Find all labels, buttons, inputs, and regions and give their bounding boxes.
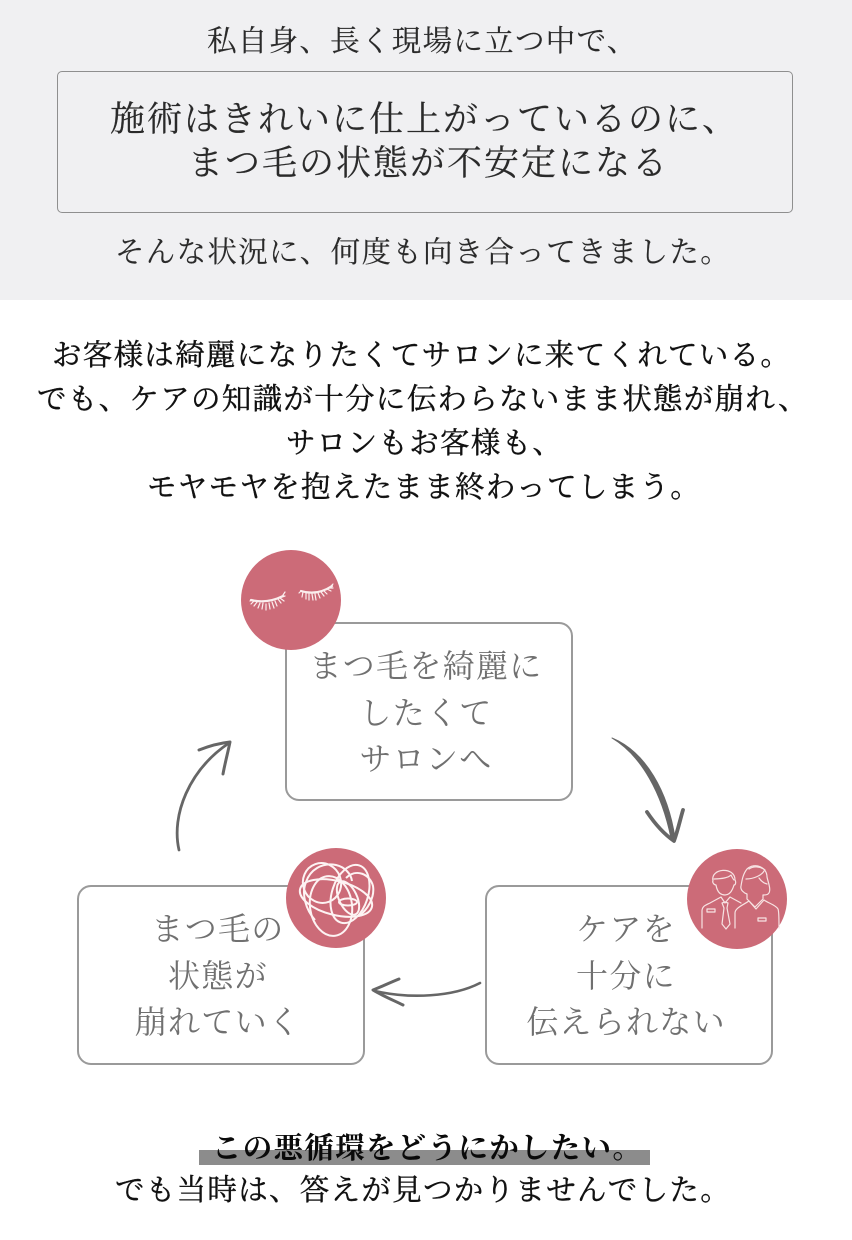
arrow: right box to left box — [372, 978, 482, 1007]
panel: cycle box left — [77, 885, 365, 1065]
text: box top label: サロンへ — [359, 741, 493, 777]
arrow: top box to right box — [612, 738, 685, 843]
text: conclusion line: でも当時は、答えが見つかりませんでした。 — [115, 1175, 731, 1207]
highlight bar — [199, 1150, 650, 1165]
text block: conclusion — [115, 1132, 731, 1207]
text: box right label: 伝えられない — [526, 1004, 726, 1040]
text block: explanation: モヤモヤを抱えたまま終わってしまう。 — [147, 472, 701, 504]
text: intro line: 私自身、長く現場に立つ中で、 — [207, 26, 638, 58]
text: statement line 1: 施術はきれいに仕上がっているのに、 — [110, 100, 739, 139]
panel: cycle box top — [285, 622, 573, 801]
text: box right label: ケアを — [576, 911, 676, 947]
icon: eyelashes badge — [241, 550, 341, 650]
text block: explanation: お客様は綺麗になりたくてサロンに来てくれている。 — [52, 340, 791, 372]
text: box right label — [526, 911, 726, 1040]
callout: highlighted statement box — [57, 71, 793, 213]
text block: explanation: でも、ケアの知識が十分に伝わらないまま状態が崩れ、 — [37, 384, 809, 416]
icon: tangled lash badge — [286, 848, 386, 948]
text: box top label: したくて — [359, 694, 493, 730]
text: box left label — [135, 911, 301, 1040]
text: box left label: まつ毛の — [151, 911, 285, 947]
text block: explanation: サロンもお客様も、 — [286, 428, 563, 460]
text: conclusion bold line: この悪循環をどうにかしたい。 — [212, 1133, 643, 1165]
text: closing line: そんな状況に、何度も向き合ってきました。 — [115, 237, 731, 269]
text block: explanation — [37, 340, 809, 504]
panel: top intro band — [0, 0, 852, 300]
text: box left label: 状態が — [168, 958, 268, 994]
text: statement line 2: まつ毛の状態が不安定になる — [188, 144, 669, 183]
text: box top label: まつ毛を綺麗に — [309, 648, 543, 684]
text: box right label: 十分に — [576, 958, 676, 994]
panel: cycle box right — [485, 885, 773, 1065]
icon: staff badge — [687, 849, 787, 949]
text: box left label: 崩れていく — [135, 1004, 301, 1040]
text: box top label — [309, 648, 543, 777]
arrow: left box to top box — [176, 740, 232, 852]
